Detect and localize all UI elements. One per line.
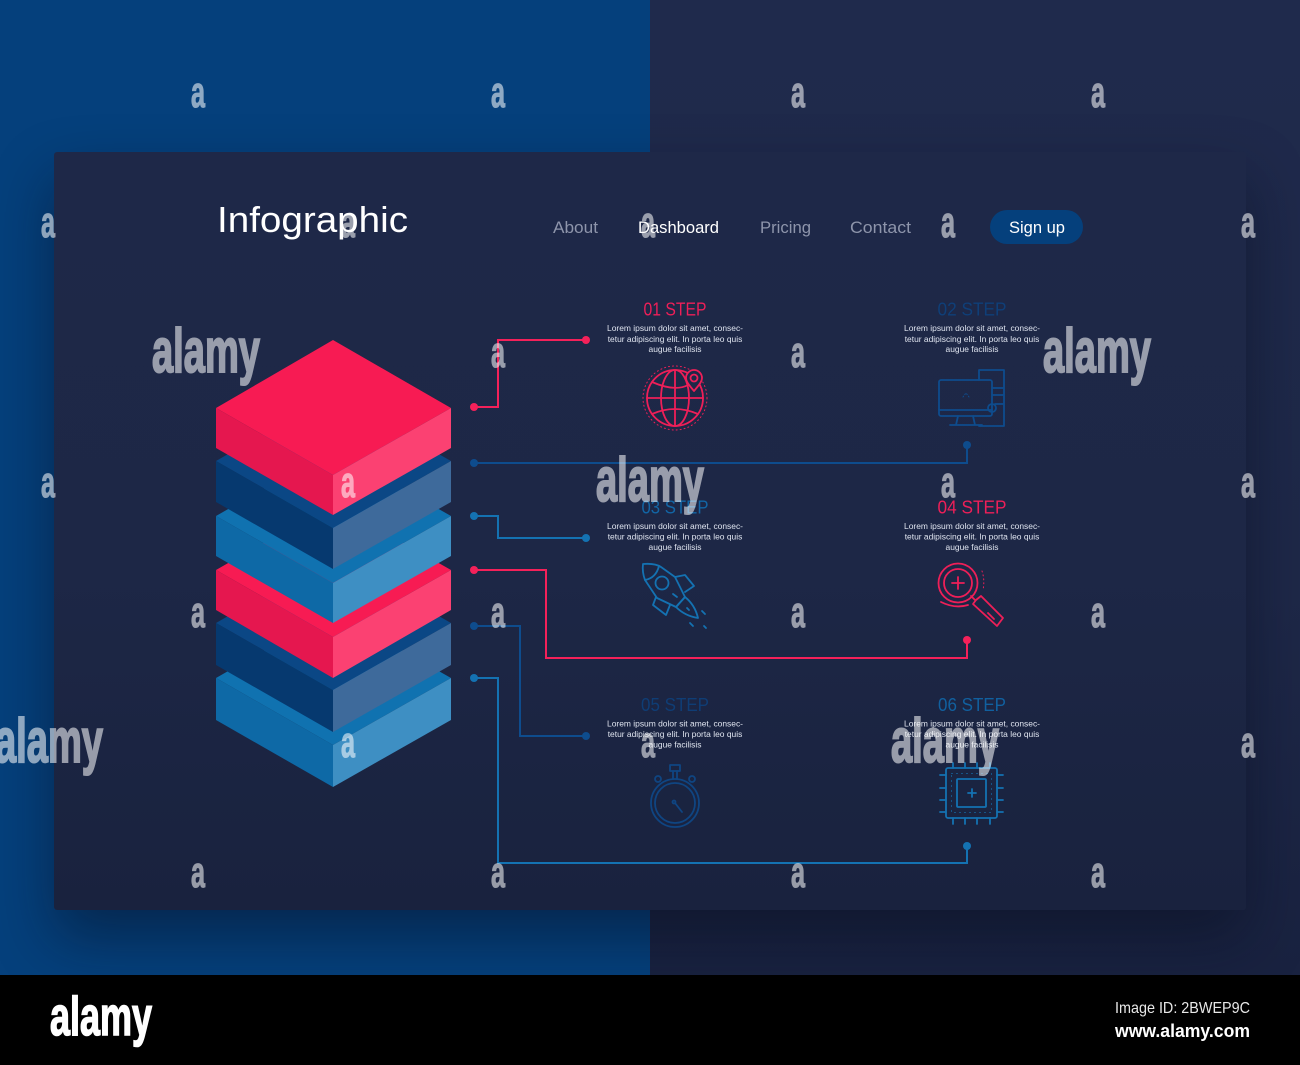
watermark: alamy repeated marks: a <box>791 328 805 377</box>
step 06 text: Lorem ipsum dolor sit amet, consec- <box>904 718 1040 728</box>
layer 2: navy <box>216 394 451 569</box>
nav: Dashboard: Dashboard <box>638 218 719 237</box>
icon: magnifier <box>938 564 1003 626</box>
layer 6: blue <box>216 611 451 787</box>
step 04 heading: 04 STEP <box>938 496 1006 518</box>
icon: globe with pin <box>643 366 707 430</box>
watermark: alamy repeated marks: a <box>491 68 505 117</box>
background: left blue panel <box>0 0 650 975</box>
step 05 text: tetur adipiscing elit. In porta leo quis <box>608 729 742 739</box>
isometric layered stack <box>216 340 451 787</box>
step 05 <box>607 694 743 827</box>
watermark: alamy repeated marks: alamy <box>152 317 260 386</box>
step 05 heading: 05 STEP <box>641 694 709 715</box>
icon: rocket <box>643 564 706 628</box>
step 05 text <box>607 718 743 750</box>
watermark: alamy repeated marks: alamy <box>596 446 704 515</box>
footer: image id: Image ID: 2BWEP9C <box>1115 1000 1250 1017</box>
watermark: alamy repeated marks: a <box>791 68 805 117</box>
step 01 text: tetur adipiscing elit. In porta leo quis <box>608 334 742 344</box>
layer 5: navy <box>216 556 451 732</box>
connector 3 <box>470 512 590 542</box>
watermark: alamy repeated marks: a <box>791 588 805 637</box>
background: right navy panel <box>650 0 1300 975</box>
connector 5 <box>470 622 590 740</box>
step 04 <box>904 496 1040 626</box>
watermark: alamy repeated marks: a <box>1241 458 1255 507</box>
layer 3: blue <box>216 449 451 623</box>
watermark: alamy repeated marks: a <box>191 588 205 637</box>
layer 1: red top <box>216 340 451 515</box>
watermark: alamy repeated marks: a <box>1091 588 1105 637</box>
step 03 text: Lorem ipsum dolor sit amet, consec- <box>607 521 743 531</box>
button: Sign up <box>990 210 1083 244</box>
watermark: alamy repeated marks: a <box>791 848 805 897</box>
step 04 text: augue facilisis <box>946 542 998 552</box>
nav: About: About <box>553 218 598 237</box>
watermark: alamy repeated marks: a <box>941 198 955 247</box>
watermark: alamy repeated marks: a <box>41 198 55 247</box>
watermark: alamy repeated marks: a <box>341 718 355 767</box>
step 06 heading: 06 STEP <box>938 694 1006 715</box>
layer 4: red <box>216 503 451 678</box>
step 06 <box>904 694 1040 824</box>
step 01 text: Lorem ipsum dolor sit amet, consec- <box>607 323 743 333</box>
nav: Pricing: Pricing <box>760 218 811 237</box>
watermark: alamy repeated marks: alamy <box>891 707 999 776</box>
watermark: alamy repeated marks <box>0 68 1255 897</box>
step 04 text: Lorem ipsum dolor sit amet, consec- <box>904 521 1040 531</box>
watermark: alamy repeated marks: a <box>491 588 505 637</box>
footer logo: alamy: alamy <box>50 985 152 1047</box>
watermark: alamy repeated marks: a <box>1091 68 1105 117</box>
step 03 text <box>607 521 743 552</box>
watermark: alamy repeated marks: a <box>641 198 655 247</box>
step 02 text: tetur adipiscing elit. In porta leo quis <box>905 334 1039 344</box>
button: Sign up: Sign up <box>1009 218 1065 237</box>
step 06 text: tetur adipiscing elit. In porta leo quis <box>905 729 1039 739</box>
step 06 text <box>904 718 1040 750</box>
nav: Contact: Contact <box>850 218 911 237</box>
step 02 heading: 02 STEP <box>938 298 1006 320</box>
watermark: alamy repeated marks: a <box>491 848 505 897</box>
watermark: alamy repeated marks: alamy <box>1043 317 1151 386</box>
connector 2 <box>470 441 971 467</box>
step 04 text <box>904 521 1040 552</box>
step 01 heading: 01 STEP <box>644 298 706 320</box>
step 03 text: augue facilisis <box>648 542 702 552</box>
watermark: alamy repeated marks: a <box>191 68 205 117</box>
footer: website: www.alamy.com <box>1114 1021 1250 1041</box>
step 05 text: Lorem ipsum dolor sit amet, consec- <box>607 718 743 728</box>
watermark: alamy repeated marks: a <box>1241 718 1255 767</box>
watermark: alamy repeated marks: alamy <box>0 707 103 776</box>
step 02 text <box>904 323 1040 354</box>
step 05 text: augue facilisis <box>648 740 702 750</box>
icon: microchip <box>940 763 1003 824</box>
step 01 <box>607 298 743 430</box>
connector 6 <box>470 674 971 863</box>
step 02 <box>904 298 1040 426</box>
watermark: alamy repeated marks: a <box>641 718 655 767</box>
navigation menu <box>553 210 1083 244</box>
watermark: alamy repeated marks: a <box>491 328 505 377</box>
step 04 text: tetur adipiscing elit. In porta leo quis <box>905 532 1039 542</box>
watermark: alamy repeated marks: a <box>1091 848 1105 897</box>
step 03 heading: 03 STEP <box>642 496 708 518</box>
icon: desktop computer <box>939 370 1004 426</box>
step 06 text: augue facilisis <box>946 740 998 750</box>
step 03 <box>607 496 743 628</box>
watermark: alamy repeated marks: a <box>191 848 205 897</box>
icon: stopwatch <box>651 765 699 827</box>
title: Infographic <box>217 199 408 240</box>
step 02 text: Lorem ipsum dolor sit amet, consec- <box>904 323 1040 333</box>
step 03 text: tetur adipiscing elit. In porta leo quis <box>608 532 742 542</box>
step 01 text: augue facilisis <box>648 344 702 354</box>
step 01 text <box>607 323 743 354</box>
step 02 text: augue facilisis <box>946 344 998 354</box>
connector 4 <box>470 566 971 658</box>
connector 1 <box>470 336 590 411</box>
main card <box>54 152 1246 910</box>
watermark: alamy repeated marks: a <box>41 458 55 507</box>
watermark: alamy repeated marks: a <box>1241 198 1255 247</box>
watermark: alamy repeated marks: a <box>941 458 955 507</box>
watermark: alamy repeated marks: a <box>341 198 355 247</box>
watermark: alamy repeated marks: a <box>341 458 355 507</box>
